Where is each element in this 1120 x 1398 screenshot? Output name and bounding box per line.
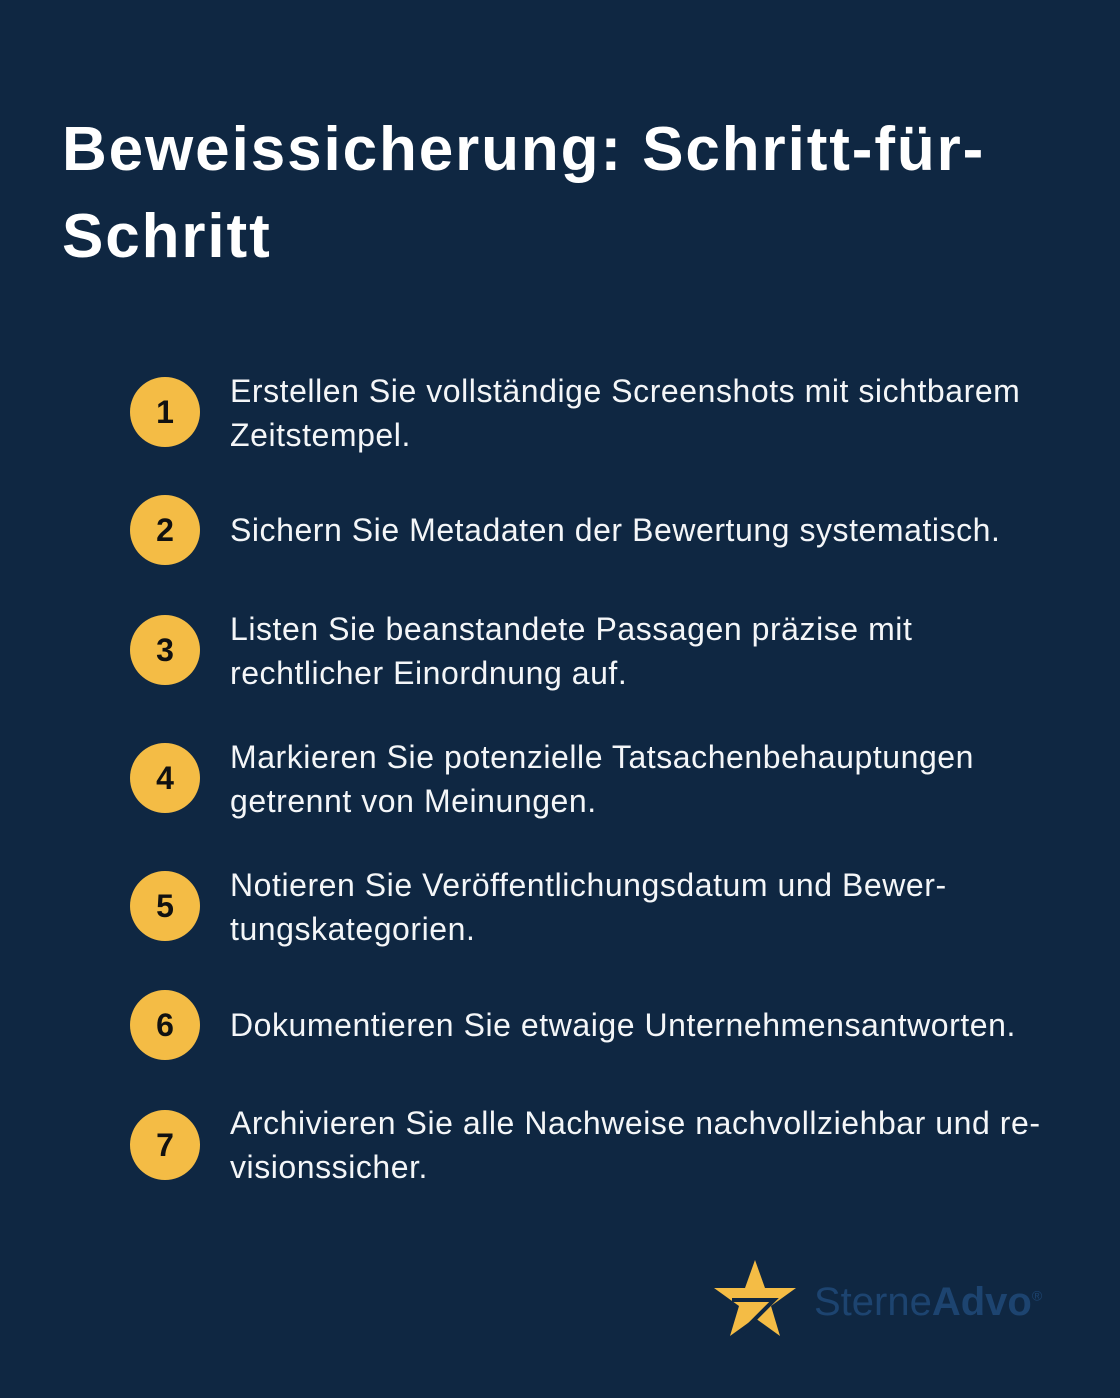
step 2: Sichern Sie Metadaten der Bewertung systematisch. xyxy=(230,512,1000,548)
step 1: Erstellen Sie vollständige Screenshots mit sichtbarem xyxy=(230,373,1020,409)
step 6: Dokumentieren Sie etwaige Unternehmensantworten. xyxy=(230,1007,1016,1043)
title: Beweissicherung: Schritt-für- xyxy=(62,115,985,184)
step 5: 5 xyxy=(156,888,174,924)
step 4: getrennt von Meinungen. xyxy=(230,783,597,819)
step 4 xyxy=(130,739,974,819)
step 3: Listen Sie beanstandete Passagen präzise mit xyxy=(230,611,912,647)
step 7: visionssicher. xyxy=(230,1149,428,1185)
icon: star xyxy=(714,1260,796,1336)
step 7 xyxy=(130,1105,1041,1185)
step 7: 7 xyxy=(156,1127,174,1163)
logo xyxy=(714,1260,1042,1336)
step 1 xyxy=(130,373,1020,453)
brand name: SterneAdvo® xyxy=(814,1280,1042,1324)
step 3: 3 xyxy=(156,632,174,668)
step 1: 1 xyxy=(156,394,174,430)
step 4: 4 xyxy=(156,760,174,796)
title: Schritt xyxy=(62,202,272,271)
title xyxy=(62,115,985,271)
step 5: Notieren Sie Veröffentlichungsdatum und Bewer- xyxy=(230,867,947,903)
step 1: Zeitstempel. xyxy=(230,417,411,453)
step 2 xyxy=(130,495,1000,565)
step 5: tungskategorien. xyxy=(230,911,475,947)
step 7: Archivieren Sie alle Nachweise nachvollziehbar und re- xyxy=(230,1105,1041,1141)
step 6: 6 xyxy=(156,1007,174,1043)
step 2: 2 xyxy=(156,512,174,548)
step 6 xyxy=(130,990,1016,1060)
step 3 xyxy=(130,611,912,691)
step 3: rechtlicher Einordnung auf. xyxy=(230,655,627,691)
step 4: Markieren Sie potenzielle Tatsachenbehauptungen xyxy=(230,739,974,775)
step 5 xyxy=(130,867,947,947)
